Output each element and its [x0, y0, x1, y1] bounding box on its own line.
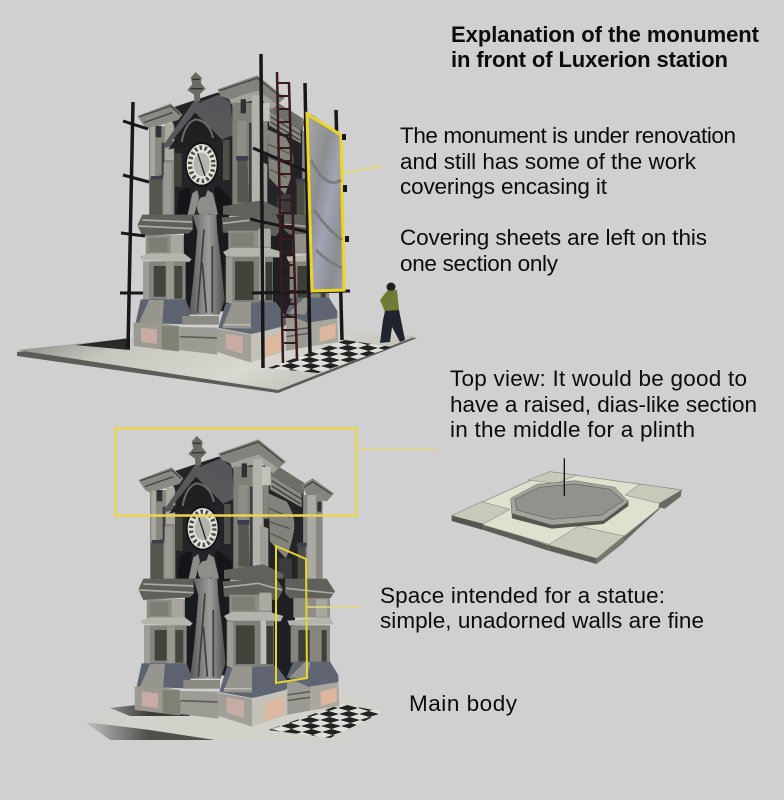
- title: Explanation of the monument: [451, 22, 760, 47]
- top floor slab: [17, 333, 417, 393]
- statue space note text: simple, unadorned walls are fine: [380, 608, 704, 633]
- covering note text: The monument is under renovation: [400, 123, 736, 148]
- bottom monument model: [135, 436, 339, 727]
- connector to covering note: [343, 166, 382, 173]
- main body label: Main body: [409, 691, 518, 716]
- work covering sheet with yellow outline: [307, 114, 349, 291]
- connector from statue space to note: [307, 606, 361, 608]
- statue space note text: Space intended for a statue:: [380, 583, 665, 608]
- top view plan of dias: [452, 458, 682, 564]
- dias pointer: [562, 458, 566, 496]
- yellow outline: statue space: [276, 546, 307, 683]
- top monument model: [134, 72, 338, 363]
- title: in front of Luxerion station: [451, 47, 728, 72]
- top view note text: have a raised, dias-like section: [450, 392, 757, 417]
- covering note text: and still has some of the work: [400, 149, 697, 174]
- scaffold poles: [120, 54, 350, 368]
- covering note text: coverings encasing it: [400, 174, 608, 199]
- figure of a man: [380, 282, 405, 343]
- bottom illustration: main body: [78, 436, 383, 745]
- bottom floor slab with fade: [78, 695, 383, 745]
- statue space note text: [380, 583, 704, 633]
- top view note text: Top view: It would be good to: [450, 366, 747, 391]
- covering note text: [400, 123, 736, 276]
- title: [451, 22, 760, 72]
- top view note text: in the middle for a plinth: [450, 417, 695, 442]
- top illustration: monument under renovation: [17, 54, 417, 393]
- covering note text: one section only: [400, 251, 559, 276]
- ladder: [277, 72, 297, 363]
- covering note text: Covering sheets are left on this: [400, 225, 707, 250]
- connector from upper section to top view note: [356, 448, 436, 450]
- yellow frame: upper section: [116, 428, 356, 516]
- top view note text: [450, 366, 757, 442]
